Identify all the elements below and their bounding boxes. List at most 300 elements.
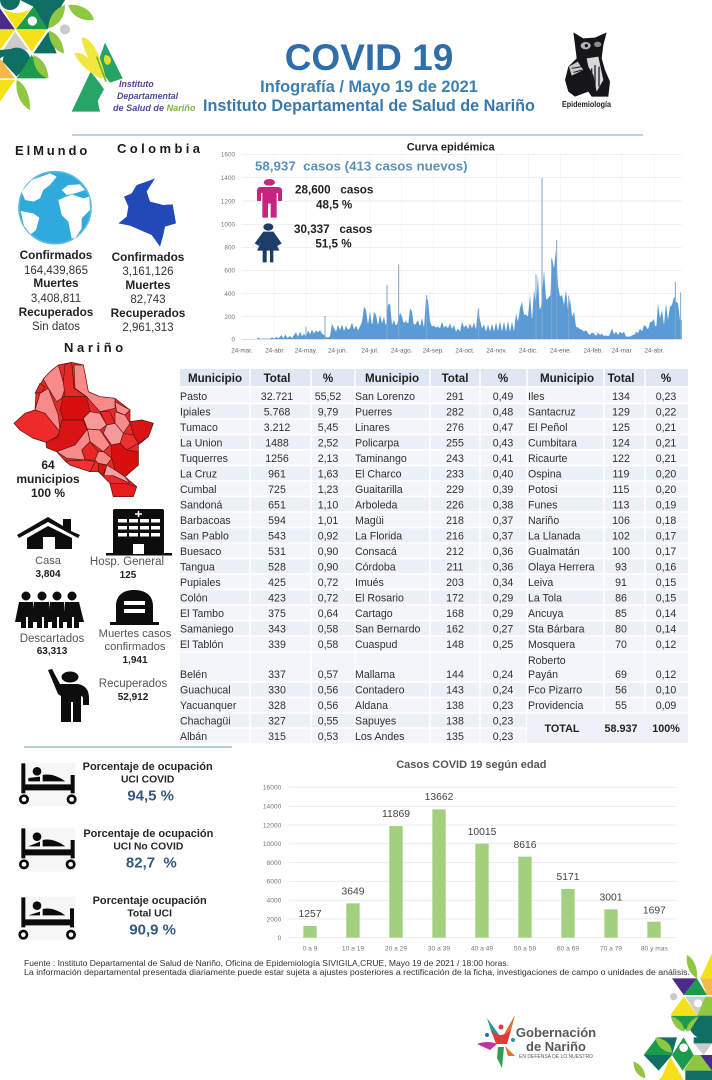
label: Casa xyxy=(35,555,62,580)
icon: globe xyxy=(19,172,91,244)
table: cases per municipality: 282 xyxy=(446,406,464,418)
table: cases per municipality: El Tablón xyxy=(180,639,223,651)
table: cases per municipality: 337 xyxy=(268,669,286,681)
label: Descartados: Descartados xyxy=(20,633,85,645)
chart: epidemic curve: Curva epidémica xyxy=(407,141,496,153)
table: cases per municipality: 0,72 xyxy=(318,577,338,589)
label: Descartados xyxy=(20,633,85,657)
panel: ICU occupancy xyxy=(20,761,214,940)
table: cases per municipality: 328 xyxy=(268,700,286,712)
label: Hosp. General: Hosp. General xyxy=(90,556,164,568)
chart: cases by age: 80 y mas xyxy=(641,946,668,953)
text: municipalities count: municipios xyxy=(16,472,80,486)
chart: cases by age: 20 a 29 xyxy=(385,946,407,953)
table: cases per municipality: Funes xyxy=(528,500,557,512)
chart: epidemic curve: 1400 xyxy=(221,175,235,182)
table: cases per municipality: Municipio xyxy=(188,372,242,385)
table: cases per municipality: Total xyxy=(608,372,634,385)
table: cases per municipality: 56 xyxy=(615,684,627,696)
table: cases per municipality: 0,19 xyxy=(656,500,676,512)
table: cases per municipality: 0,18 xyxy=(656,515,676,527)
table: cases per municipality: El Tambo xyxy=(180,608,224,620)
table: cases per municipality: 0,41 xyxy=(493,453,513,465)
table: cases per municipality: 375 xyxy=(268,608,286,620)
table: cases per municipality: Taminango xyxy=(355,453,407,465)
table: cases per municipality: 255 xyxy=(446,438,464,450)
table: cases per municipality: 1256 xyxy=(265,453,289,465)
table: cases per municipality: 0,21 xyxy=(656,453,676,465)
logo: Instituto Departamental de Salud de Nariño: Departamental xyxy=(117,91,179,101)
table: cases per municipality xyxy=(180,369,688,743)
table: cases per municipality: Providencia xyxy=(528,700,583,712)
table: cases per municipality: 0,27 xyxy=(493,624,513,636)
table: cases per municipality: 339 xyxy=(268,639,286,651)
text: municipalities count: 100 % xyxy=(31,486,65,500)
chart: epidemic curve: 24-mar. xyxy=(231,347,253,354)
table: cases per municipality: 0,25 xyxy=(493,639,513,651)
table: cases per municipality: Guachucal xyxy=(180,684,231,696)
label: Recuperados xyxy=(99,678,167,703)
table: cases per municipality: 291 xyxy=(446,391,464,403)
table: cases per municipality: La Cruz xyxy=(180,468,217,480)
table: cases per municipality: 102 xyxy=(612,530,630,542)
table: cases per municipality: 93 xyxy=(615,562,627,574)
table: cases per municipality: Chachagüi xyxy=(180,716,231,728)
table: cases per municipality: 0,49 xyxy=(493,391,513,403)
epidemic bars xyxy=(242,178,682,339)
icon: Colombia map xyxy=(118,178,176,247)
table: cases per municipality: 0,90 xyxy=(318,562,338,574)
table: cases per municipality: Aldana xyxy=(355,700,388,712)
chart: epidemic curve: 24-oct. xyxy=(455,347,475,354)
table: cases per municipality: 1,23 xyxy=(318,484,338,496)
table: cases per municipality: Pasto xyxy=(180,391,207,403)
table: cases per municipality: % xyxy=(323,372,333,385)
text: world statistics xyxy=(19,248,94,333)
chart: cases by age: 6000 xyxy=(267,879,282,886)
table: cases per municipality: Leiva xyxy=(528,577,553,589)
table: cases per municipality: 211 xyxy=(447,562,464,574)
chart: epidemic curve: 24-ago. xyxy=(391,347,413,354)
logo: Gobernación de Nariño: Gobernación xyxy=(516,1025,596,1040)
table: cases per municipality: 148 xyxy=(446,639,464,651)
chart: epidemic curve: 30,337 casos xyxy=(294,223,372,236)
text: UCI COVID: 94,5 % xyxy=(127,787,174,804)
table: cases per municipality: 203 xyxy=(446,577,464,589)
table: cases per municipality: 1,01 xyxy=(318,515,338,527)
table: cases per municipality: 0,10 xyxy=(656,684,676,696)
text: Colombia statistics: Recuperados xyxy=(111,306,186,320)
chart: epidemic curve: 24-jun. xyxy=(328,347,348,354)
table: cases per municipality: 0,14 xyxy=(656,608,676,620)
table: cases per municipality: 0,57 xyxy=(318,669,338,681)
table: cases per municipality: Mallama xyxy=(355,669,395,681)
chart: epidemic curve: 800 xyxy=(224,245,235,252)
icon: bed 2 xyxy=(20,828,75,872)
chart: cases by age: 30 a 39 xyxy=(428,946,450,953)
table: cases per municipality: 0,29 xyxy=(493,608,513,620)
chart: epidemic curve: 48,5 % xyxy=(316,198,353,211)
table: cases per municipality: Colón xyxy=(180,592,208,604)
table: cases per municipality: 330 xyxy=(268,684,286,696)
table: cases per municipality: 125 xyxy=(612,422,630,434)
table: cases per municipality: 0,37 xyxy=(493,515,513,527)
table: cases per municipality: Payán xyxy=(528,669,558,681)
text: source note: Fuente : Instituto Departamental de Salud de Nariño, Oficina de Epidemiología SIVIGILA,CRUE, Mayo 19 de 2021 / 18:00 horas. xyxy=(24,959,509,968)
table: cases per municipality: 276 xyxy=(446,422,464,434)
table: cases per municipality: 0,92 xyxy=(318,530,338,542)
title: Infografía / Mayo 19 de 2021 xyxy=(260,78,478,96)
table: cases per municipality: Municipio xyxy=(540,372,594,385)
table: cases per municipality: 229 xyxy=(446,484,464,496)
chart: epidemic curve: 24-abr. xyxy=(265,347,285,354)
table: cases per municipality: 0,24 xyxy=(493,669,513,681)
logo: owl Epidemiología: Epidemiología xyxy=(562,99,611,109)
chart: cases by age: 40 a 49 xyxy=(471,946,493,953)
table: cases per municipality: 3.212 xyxy=(264,422,290,434)
table: cases per municipality: 0,21 xyxy=(656,422,676,434)
table: cases per municipality: 315 xyxy=(268,731,286,743)
chart: cases by age: 10015 xyxy=(468,827,497,838)
table: cases per municipality: Sta Bárbara xyxy=(528,624,585,636)
label: Muertes casos confirmados xyxy=(99,628,172,666)
table: cases per municipality: La Tola xyxy=(528,592,562,604)
table: cases per municipality: 0,39 xyxy=(493,484,513,496)
table: cases per municipality: % xyxy=(498,372,508,385)
title xyxy=(203,37,535,115)
table: cases per municipality: 0,36 xyxy=(493,562,513,574)
text: Colombia statistics: Muertes xyxy=(125,278,171,292)
text: source note xyxy=(24,959,690,977)
table: cases per municipality: 143 xyxy=(446,684,464,696)
map: Nariño municipalities xyxy=(14,362,153,497)
chart: epidemic curve: 24-sep. xyxy=(423,347,444,354)
chart: epidemic curve: 200 xyxy=(224,314,235,321)
table: cases per municipality: Albán xyxy=(180,731,207,743)
label: Muertes casos confirmados: 1,941 xyxy=(122,655,148,666)
table: cases per municipality: Guaitarilla xyxy=(355,484,403,496)
table: cases per municipality: 0,21 xyxy=(656,438,676,450)
text: UCI No COVID: Porcentaje de ocupación xyxy=(83,828,214,840)
table: cases per municipality: 0,15 xyxy=(656,592,676,604)
chart: cases by age: Casos COVID 19 según edad xyxy=(396,759,546,771)
text: world statistics: Recuperados xyxy=(19,305,94,319)
chart: cases by age: 3001 xyxy=(600,893,623,904)
table: cases per municipality: Nariño xyxy=(528,515,559,527)
text: Colombia statistics: Confirmados xyxy=(112,250,185,264)
text: UCI No COVID xyxy=(83,828,214,872)
table: cases per municipality: 531 xyxy=(268,546,286,558)
chart: epidemic curve: 1000 xyxy=(221,222,235,229)
chart: cases by age: 50 a 59 xyxy=(514,946,536,953)
table: cases per municipality: Contadero xyxy=(355,684,405,696)
table: cases per municipality: Arboleda xyxy=(355,500,398,512)
table: cases per municipality: Consacá xyxy=(355,546,397,558)
table: cases per municipality: 651 xyxy=(268,500,286,512)
table: cases per municipality: 0,23 xyxy=(493,700,513,712)
table: cases per municipality: 0,17 xyxy=(656,530,676,542)
table: cases per municipality: 594 xyxy=(268,515,286,527)
table: cases per municipality: 0,64 xyxy=(318,608,338,620)
label: Recuperados: 52,912 xyxy=(118,692,149,703)
text: Total UCI: Total UCI xyxy=(127,909,172,920)
table: cases per municipality: Olaya Herrera xyxy=(528,562,595,574)
table: cases per municipality: 218 xyxy=(446,515,464,527)
table: cases per municipality: 134 xyxy=(612,391,630,403)
table: cases per municipality: Tangua xyxy=(180,562,215,574)
table: cases per municipality: 138 xyxy=(446,716,464,728)
table: cases per municipality: Ospina xyxy=(528,468,562,480)
table: cases per municipality: 0,23 xyxy=(493,716,513,728)
table: cases per municipality: El Charco xyxy=(355,468,402,480)
chart: cases by age: 10000 xyxy=(263,841,282,848)
table: cases per municipality: 0,56 xyxy=(318,684,338,696)
table: cases per municipality: Ricaurte xyxy=(528,453,568,465)
table: cases per municipality: 0,53 xyxy=(318,731,338,743)
label: Casa: 3,804 xyxy=(35,569,61,580)
chart: epidemic curve: 1200 xyxy=(221,198,235,205)
table: cases per municipality: 0,23 xyxy=(656,391,676,403)
table: cases per municipality: Gualmatán xyxy=(528,546,580,558)
table: cases per municipality: Magüi xyxy=(355,515,384,527)
table: cases per municipality: Iles xyxy=(528,391,544,403)
chart: cases by age: 5171 xyxy=(557,872,580,883)
icon: man xyxy=(257,179,282,218)
table: cases per municipality: Barbacoas xyxy=(180,515,231,527)
table: cases per municipality: 212 xyxy=(446,546,464,558)
table: cases per municipality: 55,52 xyxy=(315,391,341,403)
table: cases per municipality: 0,17 xyxy=(656,546,676,558)
table: cases per municipality: 0,48 xyxy=(493,406,513,418)
chart: cases by age: 4000 xyxy=(267,898,282,905)
icon: group of people xyxy=(15,592,84,628)
table: cases per municipality: 86 xyxy=(615,592,627,604)
table: cases per municipality: 233 xyxy=(446,468,464,480)
table: cases per municipality: Municipio xyxy=(365,372,419,385)
text: Colombia statistics: 3,161,126 xyxy=(122,266,174,278)
table: cases per municipality: 135 xyxy=(446,731,464,743)
table: cases per municipality: 1,63 xyxy=(318,468,338,480)
table: cases per municipality: 528 xyxy=(268,562,286,574)
table: cases per municipality: 0,56 xyxy=(318,700,338,712)
icon: house xyxy=(17,517,80,549)
table: cases per municipality: 216 xyxy=(446,530,464,542)
logo: Gobernación de Nariño: EN DEFENSA DE LO NUESTRO xyxy=(519,1054,593,1060)
logo: Instituto Departamental de Salud de Nariño: de Salud de Nariño xyxy=(113,103,196,113)
table: cases per municipality: Los Andes xyxy=(355,731,404,743)
table: cases per municipality: 327 xyxy=(268,716,286,728)
table: cases per municipality: Buesaco xyxy=(180,546,221,558)
chart: epidemic curve: 600 xyxy=(224,268,235,275)
text: Colombia statistics xyxy=(111,250,186,334)
decoration: bottom-right geometric pattern xyxy=(634,953,712,1080)
heading: Colombia: Colombia xyxy=(117,141,203,156)
logo: owl Epidemiología xyxy=(562,32,611,109)
table: cases per municipality: Ancuya xyxy=(528,608,563,620)
chart: cases by age: 13662 xyxy=(425,792,454,803)
table: cases per municipality: 0,43 xyxy=(493,438,513,450)
icon: tombstone xyxy=(110,590,159,625)
table: cases per municipality: 0,58 xyxy=(318,624,338,636)
chart: cases by age: 1697 xyxy=(643,905,666,916)
label: Hosp. General: 125 xyxy=(120,570,137,581)
text: world statistics: Confirmados xyxy=(20,248,93,262)
table: cases per municipality: Potosi xyxy=(528,484,557,496)
table: cases per municipality: 124 xyxy=(612,438,630,450)
table: cases per municipality: Yacuanquer xyxy=(180,700,237,712)
table: cases per municipality: 0,40 xyxy=(493,468,513,480)
chart: cases by age: 60 a 69 xyxy=(557,946,579,953)
table: cases per municipality: La Florida xyxy=(355,530,402,542)
chart: epidemic curve: 1600 xyxy=(221,152,235,159)
chart: cases by age: 11869 xyxy=(382,809,410,820)
table: cases per municipality: 0,22 xyxy=(656,406,676,418)
table: cases per municipality: 0,47 xyxy=(493,422,513,434)
table: cases per municipality: 0,29 xyxy=(493,592,513,604)
table: cases per municipality: 106 xyxy=(612,515,630,527)
table: cases per municipality: 0,09 xyxy=(656,700,676,712)
table: cases per municipality: Total xyxy=(264,372,290,385)
chart: epidemic curve: 58,937 casos (413 casos nuevos) xyxy=(255,159,468,174)
table: cases per municipality: 100 xyxy=(612,546,630,558)
chart: epidemic curve: 24-mar xyxy=(612,347,632,354)
table: cases per municipality: 0,20 xyxy=(656,468,676,480)
chart: cases by age xyxy=(263,759,676,953)
table: cases per municipality: 70 xyxy=(615,639,627,651)
table: cases per municipality: 85 xyxy=(615,608,627,620)
table: cases per municipality: 55 xyxy=(615,700,627,712)
table: cases per municipality: 0,37 xyxy=(493,530,513,542)
table: cases per municipality: Fco Pizarro xyxy=(528,684,582,696)
table: cases per municipality: Pupiales xyxy=(180,577,221,589)
table: cases per municipality: Cartago xyxy=(355,608,393,620)
table: cases per municipality: Ipiales xyxy=(180,406,211,418)
label: Muertes casos confirmados: confirmados xyxy=(105,641,166,653)
label: Hosp. General xyxy=(90,556,164,581)
table: cases per municipality: 129 xyxy=(612,406,630,418)
table: cases per municipality: 0,72 xyxy=(318,592,338,604)
table: cases per municipality: 725 xyxy=(268,484,286,496)
table: cases per municipality: 0,24 xyxy=(493,684,513,696)
chart: epidemic curve: 28,600 casos xyxy=(295,183,373,196)
table: cases per municipality: 343 xyxy=(268,624,286,636)
icon: woman xyxy=(255,223,282,262)
table: cases per municipality: 0,90 xyxy=(318,546,338,558)
table: cases per municipality: 0,14 xyxy=(656,624,676,636)
heading: Nariño: Nariño xyxy=(64,340,127,355)
table: cases per municipality: Tumaco xyxy=(180,422,218,434)
table: cases per municipality: 144 xyxy=(446,669,464,681)
chart: cases by age: 12000 xyxy=(263,822,282,829)
table: cases per municipality: Puerres xyxy=(355,406,392,418)
table: cases per municipality: Cumbal xyxy=(180,484,217,496)
chart: cases by age: 0 xyxy=(278,935,282,942)
label: Casa: Casa xyxy=(35,555,62,567)
table: cases per municipality: 91 xyxy=(615,577,627,589)
table: cases per municipality: 425 xyxy=(268,577,286,589)
table: cases per municipality: Sandoná xyxy=(180,500,223,512)
table: cases per municipality: 119 xyxy=(613,468,630,480)
table: cases per municipality: 122 xyxy=(612,453,630,465)
table: cases per municipality: Belén xyxy=(180,669,207,681)
text: world statistics: 3,408,811 xyxy=(31,293,81,305)
text: Total UCI: 90,9 % xyxy=(129,922,176,939)
text: source note: La información departamental presentada diariamente puede estar sujeta a ajustes posteriores a rectificación de la ficha, investigaciones de campo o unidades de análisis. xyxy=(24,968,690,977)
text: UCI COVID: Porcentaje de ocupación xyxy=(83,761,213,773)
table: cases per municipality: % xyxy=(661,372,671,385)
table: cases per municipality: Imués xyxy=(355,577,384,589)
table: cases per municipality: 1,10 xyxy=(318,500,338,512)
chart: epidemic curve: 24-abr. xyxy=(644,347,664,354)
table: cases per municipality: 115 xyxy=(613,484,630,496)
table: cases per municipality: Mosquera xyxy=(528,639,575,651)
table: cases per municipality: 100% xyxy=(652,723,680,735)
table: cases per municipality: 113 xyxy=(613,500,630,512)
text: UCI COVID xyxy=(83,761,213,804)
table: cases per municipality: 0,23 xyxy=(493,731,513,743)
text: UCI No COVID: UCI No COVID xyxy=(113,842,184,853)
table: cases per municipality: 138 xyxy=(446,700,464,712)
table: cases per municipality: 162 xyxy=(446,624,464,636)
table: cases per municipality: 1488 xyxy=(265,438,289,450)
table: cases per municipality: Linares xyxy=(355,422,390,434)
table: cases per municipality: 32.721 xyxy=(261,391,293,403)
table: cases per municipality: 0,12 xyxy=(656,669,676,681)
chart: cases by age: 0 a 9 xyxy=(303,946,318,953)
label: Muertes casos confirmados: Muertes casos xyxy=(99,628,172,640)
table: cases per municipality: 0,16 xyxy=(656,562,676,574)
text: Colombia statistics: 2,961,313 xyxy=(122,322,174,334)
text: world statistics: 164,439,865 xyxy=(24,265,88,277)
table: cases per municipality: La Union xyxy=(180,438,223,450)
table: cases per municipality: Cuaspud xyxy=(355,639,398,651)
label: Recuperados: Recuperados xyxy=(99,678,167,690)
table: cases per municipality: 80 xyxy=(615,624,627,636)
table: cases per municipality: Cumbitara xyxy=(528,438,577,450)
heading: El Mundo: ElMundo xyxy=(15,143,90,158)
text: world statistics: Sin datos xyxy=(32,321,80,333)
logo: Instituto Departamental de Salud de Nariño: Instituto xyxy=(119,79,154,89)
table: cases per municipality: 543 xyxy=(268,530,286,542)
text: municipalities count xyxy=(16,458,80,500)
table: cases per municipality: 0,20 xyxy=(656,484,676,496)
table: cases per municipality: Córdoba xyxy=(355,562,396,574)
table: cases per municipality: Total xyxy=(442,372,468,385)
text: UCI No COVID: 82,7 % xyxy=(126,855,177,872)
table: cases per municipality: 2,13 xyxy=(318,453,338,465)
chart: cases by age: 3649 xyxy=(342,887,365,898)
icon: bed 3 xyxy=(20,897,75,940)
table: cases per municipality: 0,12 xyxy=(656,639,676,651)
table: cases per municipality: Sapuyes xyxy=(355,716,396,728)
table: cases per municipality: 423 xyxy=(268,592,286,604)
decoration: top-left geometric pattern xyxy=(0,0,94,110)
table: cases per municipality: 168 xyxy=(446,608,464,620)
table: cases per municipality: 0,58 xyxy=(318,639,338,651)
chart: epidemic curve: 400 xyxy=(224,291,235,298)
table: cases per municipality: 5,45 xyxy=(318,422,338,434)
text: Total UCI xyxy=(93,895,207,939)
chart: cases by age: 16000 xyxy=(263,785,282,792)
table: cases per municipality: 226 xyxy=(446,500,464,512)
chart: epidemic curve: 24-jul. xyxy=(361,347,379,354)
text: Total UCI: Porcentaje ocupación xyxy=(93,895,207,907)
chart: epidemic curve: 24-feb. xyxy=(583,347,603,354)
text: municipalities count: 64 xyxy=(41,458,55,472)
title: Instituto Departamental de Salud de Nariño xyxy=(203,97,535,115)
table: cases per municipality: San Lorenzo xyxy=(355,391,415,403)
chart: epidemic curve xyxy=(221,141,682,354)
